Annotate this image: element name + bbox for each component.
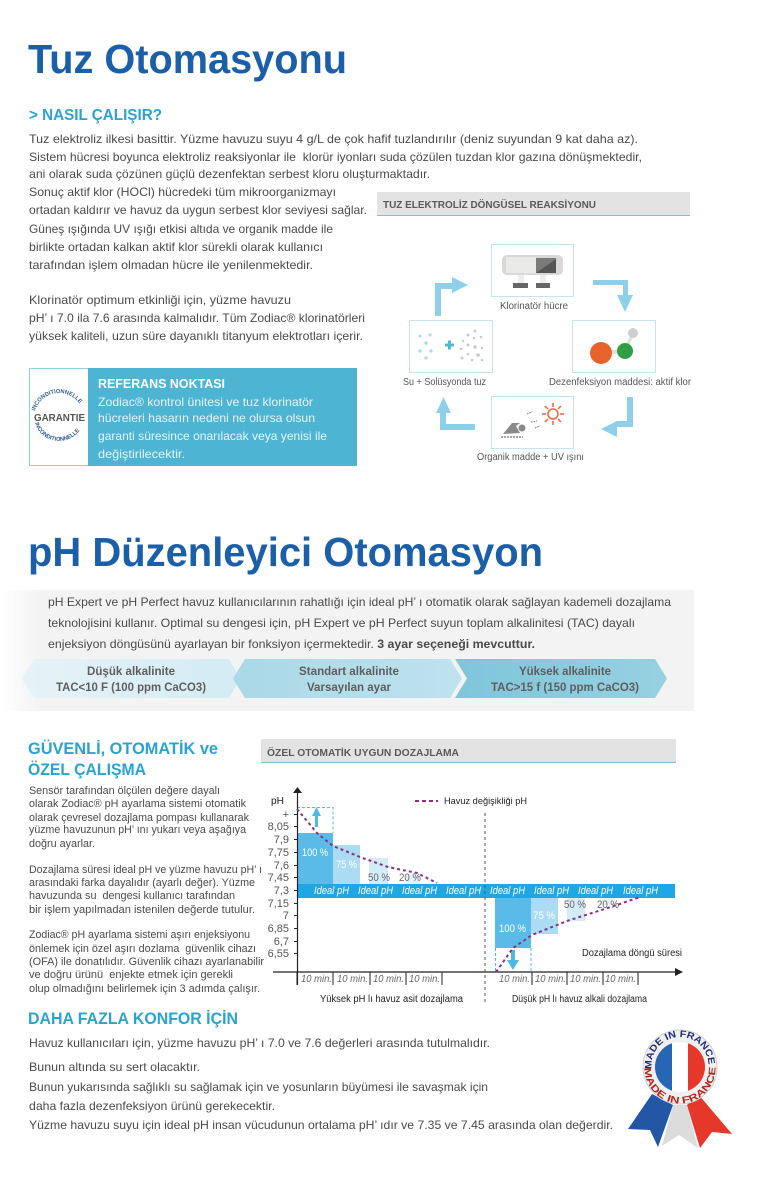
heading: Daha fazla konfor için: DAHA FAZLA KONFOR İÇİN <box>28 1009 238 1028</box>
percent labels: 20 % <box>597 899 619 911</box>
band: ideal pH: Ideal pH <box>358 885 393 897</box>
curve: high pH pool change <box>297 809 437 883</box>
text block: salt electrolysis description <box>29 132 642 343</box>
icon: guarantee badge <box>31 389 85 441</box>
y axis labels: pH <box>271 796 284 807</box>
callout: Referans noktası <box>29 368 357 466</box>
heading: chart panel <box>261 739 676 763</box>
text block: sensor and dosing description: yüzme havuzunun pH’ ını yukarı veya aşağıya <box>29 824 247 836</box>
heading: Nasıl çalışır: > NASIL ÇALIŞIR? <box>29 107 162 124</box>
time labels: 10 min. <box>499 974 530 985</box>
time labels: 10 min. <box>535 974 566 985</box>
option: high alkalinity <box>455 659 667 698</box>
text block: sensor and dosing description: doğru ayarlar. <box>29 838 95 850</box>
band: ideal pH: Ideal pH <box>402 885 437 897</box>
band: ideal pH <box>297 884 675 898</box>
text block: salt electrolysis description: Güneş ışığında UV ışığı etkisi altıda ve organik madde ile <box>29 222 333 236</box>
legend: Havuz değişikliği pH <box>444 796 527 807</box>
text block: salt electrolysis description: pH’ ı 7.0 ila 7.6 arasında kalmalıdır. Tüm Zodiac® klorinatörleri <box>29 311 365 325</box>
percent labels <box>302 847 619 935</box>
option: standard alkalinity: Varsayılan ayar <box>307 680 391 694</box>
text block: sensor and dosing description: arasındaki farka dayalıdır (ayarlı değer). Yüzme <box>29 877 255 889</box>
icon: swimmer and UV sun <box>492 396 574 448</box>
band: ideal pH: Ideal pH <box>578 885 613 897</box>
text block: salt electrolysis description: Tuz elektroliz ilkesi basittir. Yüzme havuzu suyu 4 g/L de çok hafif tuzlandırılır (deniz suyundan 9 kat daha az). <box>29 132 638 146</box>
axes <box>273 787 683 985</box>
heading: Güvenli, otomatik ve özel çalışma <box>28 739 218 779</box>
band: ideal pH: Ideal pH <box>623 885 658 897</box>
text block: salt electrolysis description: tarafından işlem olmadan hücre ile yenilenmektedir. <box>29 258 313 272</box>
curve: low pH pool change <box>496 897 640 972</box>
text block: sensor and dosing description: bir işlem yapılmadan istenilen değerde tutulur. <box>29 904 255 916</box>
callout: Referans noktası: Zodiac® kontrol ünitesi ve tuz klorinatör <box>98 395 313 409</box>
text block: intro: enjeksiyon döngüsünü ayarlayan bir fonksiyon içermektedir. 3 ayar seçeneği mevcuttur. <box>48 637 535 651</box>
band: ideal pH: Ideal pH <box>490 885 525 897</box>
y axis labels: 7 <box>283 910 289 922</box>
percent labels: 75 % <box>336 859 357 871</box>
icon: Made in France badge: MADE IN FRANCE <box>644 1067 716 1104</box>
y axis labels: 6,55 <box>268 948 289 960</box>
arrow: organic matter to salt <box>436 397 475 430</box>
text block: salt electrolysis description: birlikte ortadan kalkan aktif klor sürekli olarak kullanıcı <box>29 240 323 254</box>
y axis labels: 8,05 <box>268 821 289 833</box>
text block: intro: teknolojisini kullanır. Optimal su dengesi için, pH Expert ve pH Perfect suyun toplam alkalinitesi (TAC) dayalı <box>48 616 635 630</box>
icon: chlorinator cell <box>492 244 574 296</box>
callout: Referans noktası: değiştirilecektir. <box>98 447 185 461</box>
title: Tuz Otomasyonu: Tuz Otomasyonu <box>28 36 347 82</box>
dashed boxes: overshoot limits <box>297 808 531 972</box>
y axis labels: 7,9 <box>274 834 289 846</box>
callout: Referans noktası: REFERANS NOKTASI <box>98 376 225 391</box>
text block: comfort <box>29 1036 613 1132</box>
y axis labels: 7,15 <box>268 898 289 910</box>
y axis labels <box>268 796 289 960</box>
time labels: 10 min. <box>373 974 404 985</box>
y axis labels: 7,75 <box>268 847 289 859</box>
icon: active chlorine molecule <box>572 320 656 372</box>
option: high alkalinity: TAC>15 f (150 ppm CaCO3) <box>491 680 639 694</box>
y axis labels: + <box>283 809 289 821</box>
callout: Referans noktası: garanti süresince onarılacak veya yenisi ile <box>98 429 327 443</box>
y axis labels: 7,6 <box>274 860 289 872</box>
icon: water and dissolved salt <box>410 320 492 372</box>
y axis labels: 6,85 <box>268 923 289 935</box>
text block: sensor and dosing description: Dozajlama süresi ideal pH ve yüzme havuzu pH’ ı <box>29 864 262 876</box>
percent labels: 100 % <box>302 847 328 859</box>
percent labels: 75 % <box>533 910 555 922</box>
callout: Referans noktası: hücreleri hasarın nedeni ne olursa olsun <box>98 411 315 425</box>
band: ideal pH: Ideal pH <box>446 885 481 897</box>
text block: sensor and dosing description: olarak çevresel dozajlama pompası kullanarak <box>29 812 249 824</box>
percent labels: 100 % <box>499 923 526 935</box>
time labels: 10 min. <box>570 974 601 985</box>
text block: sensor and dosing description: havuzunda su dengesi kullanıcı tarafından <box>29 890 235 902</box>
caption: high pH: Yüksek pH lı havuz asit dozajlama <box>320 994 463 1005</box>
panel: electrolysis cycle <box>377 192 692 463</box>
panel: pH automation intro <box>0 590 694 711</box>
text block: sensor and dosing description: Zodiac® pH ayarlama sistemi aşırı enjeksiyonu <box>29 929 250 941</box>
title: pH Düzenleyici Otomasyon: pH Düzenleyici Otomasyon <box>28 529 543 575</box>
text block: salt electrolysis description: Klorinatör optimum etkinliği için, yüzme havuzu <box>29 293 291 307</box>
icon: guarantee badge: GARANTIE <box>34 413 85 424</box>
option: standard alkalinity <box>233 659 462 698</box>
text block: comfort: Havuz kullanıcıları için, yüzme havuzu pH’ ı 7.0 ve 7.6 değerleri arasında tutulmalıdır. <box>29 1036 490 1050</box>
heading: cycle panel: TUZ ELEKTROLİZ DÖNGÜSEL REAKSİYONU <box>383 198 596 211</box>
label: water and salt: Su + Solüsyonda tuz <box>403 377 486 388</box>
band: ideal pH: Ideal pH <box>534 885 569 897</box>
text block: intro: pH Expert ve pH Perfect havuz kullanıcılarının rahatlığı için ideal pH’ ı otomatik olarak sağlayan kademeli dozajlama <box>48 595 671 609</box>
option: low alkalinity: Düşük alkalinite <box>87 664 175 678</box>
text block: sensor and dosing description: (OFA) ile donatılıdır. Güvenlik cihazı ayarlanabilir <box>29 956 264 968</box>
arrow: cell to disinfectant <box>593 280 633 312</box>
text block: sensor and dosing description: önlemek için özel aşırı dozlama güvenlik cihazı <box>29 943 256 955</box>
text block: comfort: daha fazla dezenfeksiyon ürünü gerekecektir. <box>29 1099 275 1113</box>
icon: guarantee badge: INCONDITIONNELLE <box>31 389 82 411</box>
heading: Güvenli, otomatik ve özel çalışma: ÖZEL ÇALIŞMA <box>28 760 146 779</box>
arrow: salt to cell <box>435 277 468 316</box>
label: chlorinator cell: Klorinatör hücre <box>500 301 568 312</box>
arrow: pH down <box>507 950 519 970</box>
time labels: 10 min. <box>605 974 636 985</box>
time labels: 10 min. <box>337 974 368 985</box>
text block: salt electrolysis description: Sonuç aktif klor (HOCl) hücredeki tüm mikroorganizmayı <box>29 185 336 199</box>
time labels: 10 min. <box>409 974 440 985</box>
label: organic matter and UV: Organik madde + UV ışını <box>477 452 584 463</box>
text block: sensor and dosing description: olup olmadığını belirlemek için 3 adımda çalışır. <box>29 983 260 995</box>
text block: sensor and dosing description: olarak Zodiac® pH ayarlama sistemi otomatik <box>29 798 246 810</box>
text block: comfort: Yüzme havuzu suyu için ideal pH insan vücudunun ortalama pH’ ıdır ve 7.35 ve 7.45 arasında olan değerdir. <box>29 1118 613 1132</box>
text block: sensor and dosing description: Sensör tarafından ölçülen değere dayalı <box>29 785 220 797</box>
text block: salt electrolysis description: yüksek kaliteli, uzun süre dayanıklı titanyum elektrotları içerir. <box>29 329 363 343</box>
y axis labels: 6,7 <box>274 936 289 948</box>
arrow: pH up <box>312 807 321 827</box>
option: standard alkalinity: Standart alkalinite <box>299 664 399 678</box>
option: high alkalinity: Yüksek alkalinite <box>519 664 611 678</box>
y axis labels: 7,3 <box>274 885 289 897</box>
percent labels: 20 % <box>399 872 421 884</box>
icon: Made in France badge: MADE IN FRANCE <box>644 1030 716 1068</box>
axis caption: dosing cycle time: Dozajlama döngü süresi <box>582 948 682 959</box>
icon: guarantee badge: INCONDITIONNELLE <box>35 422 80 441</box>
text block: sensor and dosing description: ve doğru ürünü enjekte etmek için gerekli <box>29 969 233 981</box>
text block: sensor and dosing description <box>29 785 264 995</box>
text block: comfort: Bunun yukarısında sağlıklı su sağlamak için ve yosunların büyümesi ile savaşmak için <box>29 1080 488 1094</box>
heading: cycle panel <box>377 192 690 216</box>
divider: chart halves <box>484 813 486 1003</box>
heading: chart panel: ÖZEL OTOMATİK UYGUN DOZAJLAMA <box>267 746 459 759</box>
text block: salt electrolysis description: ani olarak suda çözünen güçlü dezenfektan serbest kloru oluşturmaktadır. <box>29 167 430 181</box>
arrow: disinfectant to organic matter <box>601 397 633 437</box>
bars: high pH acid dosing <box>297 833 420 884</box>
text block: intro <box>48 595 671 651</box>
text block: salt electrolysis description: Sistem hücresi boyunca elektroliz reaksiyonlar ile klorür iyonları suda çözülen tuzdan klor gazına dönüşmektedir, <box>29 150 642 164</box>
band: ideal pH: Ideal pH <box>314 885 349 897</box>
y axis labels: 7,45 <box>268 872 289 884</box>
time labels <box>301 974 636 985</box>
heading: Güvenli, otomatik ve özel çalışma: GÜVENLİ, OTOMATİK ve <box>28 739 218 758</box>
label: active chlorine: Dezenfeksiyon maddesi: aktif klor <box>549 377 692 388</box>
option: low alkalinity <box>22 659 240 698</box>
option: low alkalinity: TAC<10 F (100 ppm CaCO3) <box>56 680 206 694</box>
chart: pH dosing <box>268 787 683 1005</box>
percent labels: 50 % <box>368 872 390 884</box>
text block: salt electrolysis description: ortadan kaldırır ve havuz da uygun serbest klor seviyesi sağlar. <box>29 203 367 217</box>
bars: low pH alkali dosing <box>495 898 615 948</box>
caption: low pH: Düşük pH lı havuz alkali dozajlama <box>512 994 647 1005</box>
icon: Made in France badge <box>628 1030 732 1148</box>
text block: comfort: Bunun altında su sert olacaktır. <box>29 1060 200 1074</box>
time labels: 10 min. <box>301 974 332 985</box>
percent labels: 50 % <box>564 899 586 911</box>
